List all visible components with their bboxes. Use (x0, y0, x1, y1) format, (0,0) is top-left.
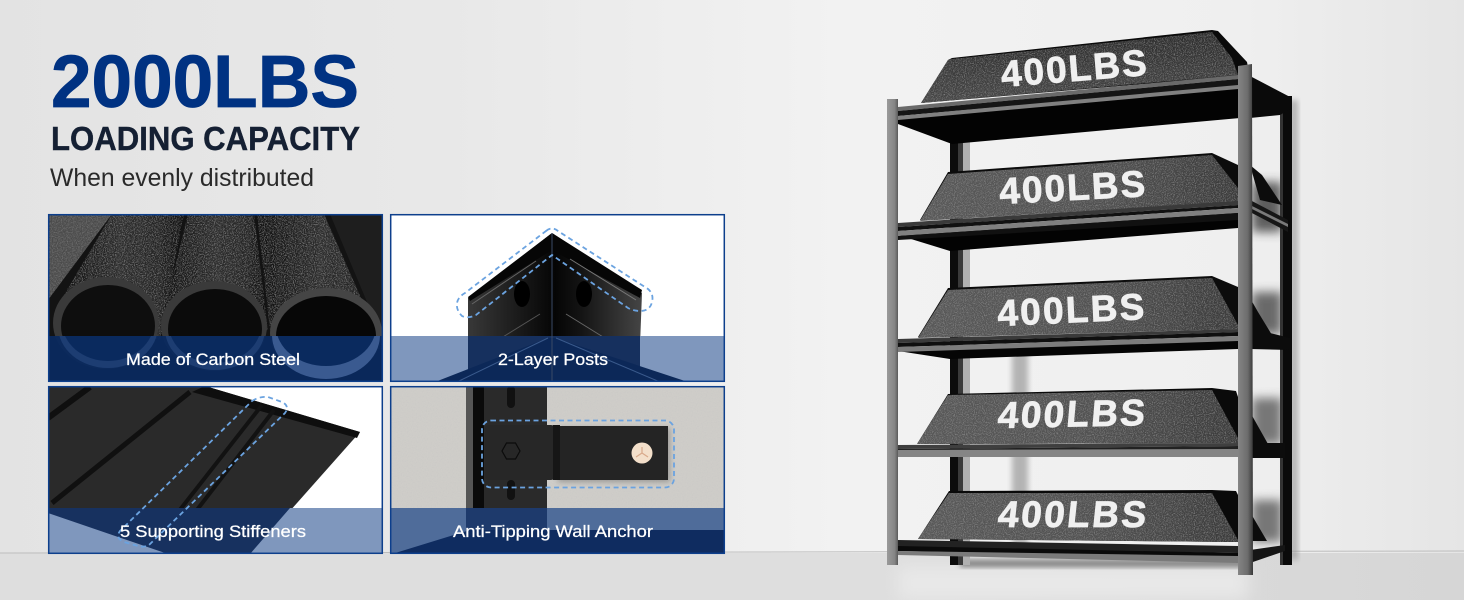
heading: loading capacity: LOADING CAPACITY (51, 120, 360, 157)
shelf tier 5 (898, 490, 1238, 563)
right-side shelf returns (1250, 76, 1292, 563)
front right post (1238, 64, 1253, 575)
dashed highlight: post profile (457, 228, 652, 317)
front left post (887, 99, 898, 565)
shelf tier 1 (898, 30, 1250, 144)
weight label: 400LBS (999, 42, 1148, 95)
shelf tier 4 (898, 388, 1238, 457)
panel: carbon steel (48, 214, 384, 382)
weight label: 400LBS (998, 163, 1146, 212)
panel: stiffeners (48, 386, 383, 556)
panel: wall anchor (390, 386, 725, 554)
weight label: 400LBS (996, 391, 1147, 436)
subheading: When evenly distributed (50, 164, 314, 192)
dashed highlight: anchor (482, 420, 674, 488)
weight label: 400LBS (996, 286, 1145, 334)
title: 2000LBS: 2000LBS (51, 40, 359, 123)
caption: anchor: Anti-Tipping Wall Anchor (453, 523, 654, 541)
weight label: 400LBS (996, 493, 1149, 535)
back posts (950, 96, 1292, 565)
shelving unit (887, 30, 1298, 575)
wall shadows behind shelf (960, 100, 1298, 567)
shelf tier 2 (898, 153, 1238, 251)
caption: carbon steel: Made of Carbon Steel (126, 351, 300, 369)
shelf tier 3 (898, 276, 1238, 359)
caption: stiffeners: 5 Supporting Stiffeners (120, 523, 306, 541)
panel: 2-layer posts (390, 214, 725, 382)
caption: posts: 2-Layer Posts (498, 351, 608, 369)
dashed highlight: stiffener (118, 397, 287, 547)
